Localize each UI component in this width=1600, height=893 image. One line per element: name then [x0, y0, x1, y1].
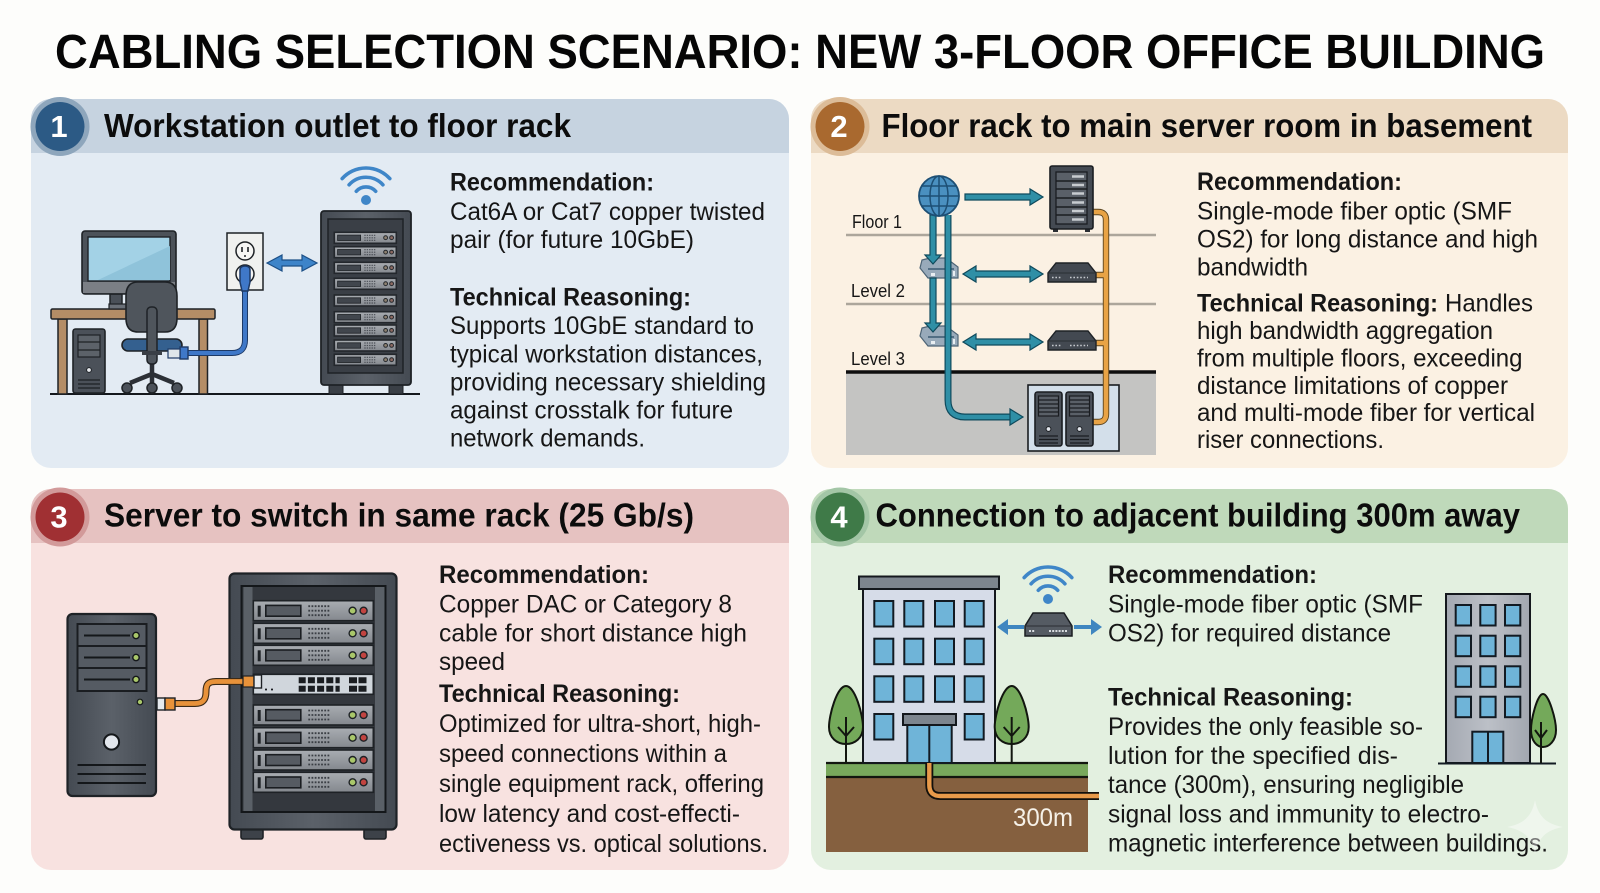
- icon: trees: [829, 686, 1029, 763]
- watermark sparkle: [1507, 800, 1563, 854]
- panel 2 technical reasoning text: Handles: [1445, 290, 1533, 318]
- panel 3 card: [31, 489, 789, 870]
- panel 3 recommendation text: cable for short distance high: [439, 620, 747, 648]
- icon: computer tower: [73, 329, 105, 393]
- icon: monitor: [82, 231, 176, 309]
- icon: server tower: [68, 614, 156, 796]
- panel 3 technical reasoning text: ectiveness vs. optical solutions.: [439, 830, 768, 858]
- panel 1 technical reasoning text: Supports 10GbE standard to: [450, 312, 754, 340]
- icon: main building: [859, 576, 999, 763]
- icon: media converter: [1025, 613, 1072, 636]
- panel 1 technical reasoning text: Technical Reasoning:: [450, 284, 691, 312]
- ground and soil: [826, 763, 1088, 852]
- panel 3 technical reasoning text: [439, 680, 768, 858]
- icon: wall outlet: [227, 233, 263, 290]
- icon: wifi signal: [1024, 567, 1072, 604]
- panel 3 heading: Server to switch in same rack (25 Gb/s): [104, 497, 694, 534]
- panel 4 number badge: [810, 488, 870, 546]
- floor lines: [846, 235, 1156, 304]
- panel 4 technical reasoning text: lution for the specified dis-: [1108, 742, 1398, 770]
- panel 4 heading: Connection to adjacent building 300m away: [876, 497, 1521, 534]
- panel 1 technical reasoning text: providing necessary shielding: [450, 369, 766, 397]
- panel 2 technical reasoning text: riser connections.: [1197, 426, 1384, 454]
- panel 1 number badge: 1: [50, 109, 68, 144]
- floor labels: Floor 1: [852, 212, 902, 232]
- panel 2 recommendation text: bandwidth: [1197, 253, 1308, 281]
- panel 1 recommendation text: Cat6A or Cat7 copper twisted: [450, 198, 765, 226]
- illustration: building riser diagram: [846, 166, 1156, 455]
- panel 3 technical reasoning text: speed connections within a: [439, 740, 727, 768]
- panel 1 number badge: [30, 97, 90, 156]
- illustration: buildings and underground fiber: [826, 567, 1556, 852]
- panel 2 number badge: 2: [830, 109, 848, 144]
- arrow: outlet to rack: [267, 255, 317, 271]
- illustration: server to switch: [68, 574, 396, 839]
- panel 2 recommendation text: Recommendation:: [1197, 168, 1402, 196]
- floor line: [50, 393, 420, 395]
- floor labels: [851, 212, 905, 369]
- underground fiber cable: [929, 763, 1099, 796]
- orange DAC cable: [157, 675, 262, 710]
- illustration: workstation to rack: [50, 168, 420, 394]
- panel 1: workstation outlet to floor rack: [30, 97, 789, 468]
- icon: wifi signal: [342, 168, 390, 205]
- server room box: [1028, 385, 1119, 451]
- panel 3 recommendation text: Recommendation:: [439, 561, 649, 589]
- panel 1 technical reasoning text: [450, 284, 766, 453]
- icon: adjacent building: [1438, 594, 1556, 764]
- panel 3 recommendation text: Copper DAC or Category 8: [439, 591, 732, 619]
- panel 4 technical reasoning text: Technical Reasoning:: [1108, 684, 1353, 712]
- panel 1 recommendation text: Recommendation:: [450, 169, 654, 197]
- panel 4 number badge: 4: [830, 500, 848, 534]
- distance label: 300m: [1013, 804, 1073, 832]
- icon: equipment rack: [230, 574, 396, 839]
- panel 2 number badge: [810, 97, 870, 156]
- panel 3 number badge: 3: [50, 500, 68, 534]
- panel 2 heading: Floor rack to main server room in basement: [882, 107, 1532, 144]
- panel 3 technical reasoning text: single equipment rack, offering: [439, 770, 764, 798]
- panel 4 recommendation text: OS2) for required distance: [1108, 620, 1391, 648]
- panel 3 recommendation text: [439, 561, 747, 676]
- orange fiber riser: [1092, 212, 1106, 422]
- icon: globe: [919, 176, 959, 216]
- icon: basement servers: [1035, 392, 1093, 446]
- panel 4 technical reasoning text: magnetic interference between buildings.: [1108, 830, 1548, 858]
- panel 4: connection to adjacent building: [810, 488, 1568, 870]
- panel 1 heading: Workstation outlet to floor rack: [104, 107, 572, 144]
- panel 1 recommendation text: [450, 169, 765, 254]
- icon: small floor switches: [920, 258, 958, 346]
- panel 4 technical reasoning text: tance (300m), ensuring negligible: [1108, 771, 1464, 799]
- panel 2 card: [811, 99, 1568, 468]
- panel 3 number badge: [30, 488, 90, 546]
- panel 2 technical reasoning text: [1197, 290, 1535, 454]
- panel 1 technical reasoning text: against crosstalk for future: [450, 397, 733, 425]
- panel 1 recommendation text: pair (for future 10GbE): [450, 226, 694, 254]
- floor labels: Level 3: [851, 349, 905, 369]
- panel 2 technical reasoning text: from multiple floors, exceeding: [1197, 345, 1522, 373]
- blue ethernet cable: [168, 266, 250, 359]
- panel 2 technical reasoning text: and multi-mode fiber for vertical: [1197, 399, 1535, 427]
- panel 2 recommendation text: [1197, 168, 1538, 281]
- panel 4 card: [811, 489, 1568, 870]
- arrows: left and right of converter: [997, 619, 1102, 635]
- panel 1 header band: [31, 99, 789, 153]
- icon: office chair: [122, 282, 182, 393]
- panel 3: server to switch in same rack: [30, 488, 789, 870]
- floor labels: Level 2: [851, 281, 905, 301]
- panel 4 technical reasoning text: Provides the only feasible so-: [1108, 713, 1423, 741]
- panel 3 header band: [31, 489, 789, 543]
- panel 4 recommendation text: Recommendation:: [1108, 561, 1317, 589]
- panel 4 technical reasoning text: [1108, 684, 1548, 858]
- panel 3 technical reasoning text: low latency and cost-effecti-: [439, 800, 740, 828]
- basement floor: [846, 372, 1156, 455]
- panel 4 header band: [811, 489, 1568, 543]
- panel 3 technical reasoning text: Technical Reasoning:: [439, 680, 680, 708]
- network switch: [253, 674, 373, 694]
- panel 2 recommendation text: OS2) for long distance and high: [1197, 225, 1538, 253]
- panel 2 recommendation text: Single-mode fiber optic (SMF: [1197, 197, 1512, 225]
- icon: floor switches: [1048, 263, 1096, 350]
- icon: top floor rack: [1050, 166, 1093, 232]
- teal riser to basement: [948, 215, 1023, 425]
- panel 4 recommendation text: [1108, 561, 1423, 648]
- arrows: teal links: [963, 189, 1043, 350]
- panel 1 technical reasoning text: typical workstation distances,: [450, 341, 763, 369]
- panel 4 recommendation text: Single-mode fiber optic (SMF: [1108, 591, 1423, 619]
- icon: tree by adjacent building: [1531, 694, 1556, 763]
- panel 1 technical reasoning text: network demands.: [450, 425, 645, 453]
- panel 1 card: [31, 99, 789, 468]
- panel 3 recommendation text: speed: [439, 648, 505, 676]
- panel 2: floor rack to main server room: [810, 97, 1568, 468]
- panel 2 technical reasoning text: high bandwidth aggregation: [1197, 317, 1493, 345]
- panel 3 technical reasoning text: Optimized for ultra-short, high-: [439, 710, 761, 738]
- title: CABLING SELECTION SCENARIO: NEW 3-FLOOR OFFICE BUILDING: [55, 26, 1545, 79]
- panel 2 technical reasoning text: Technical Reasoning:: [1197, 290, 1438, 318]
- panel 2 technical reasoning text: distance limitations of copper: [1197, 372, 1508, 400]
- icon: server rack: [321, 211, 411, 394]
- icon: desk: [51, 309, 215, 394]
- panel 4 technical reasoning text: signal loss and immunity to electro-: [1108, 801, 1489, 829]
- panel 2 header band: [811, 99, 1568, 153]
- arrow: down to level 2 and 3: [925, 215, 941, 332]
